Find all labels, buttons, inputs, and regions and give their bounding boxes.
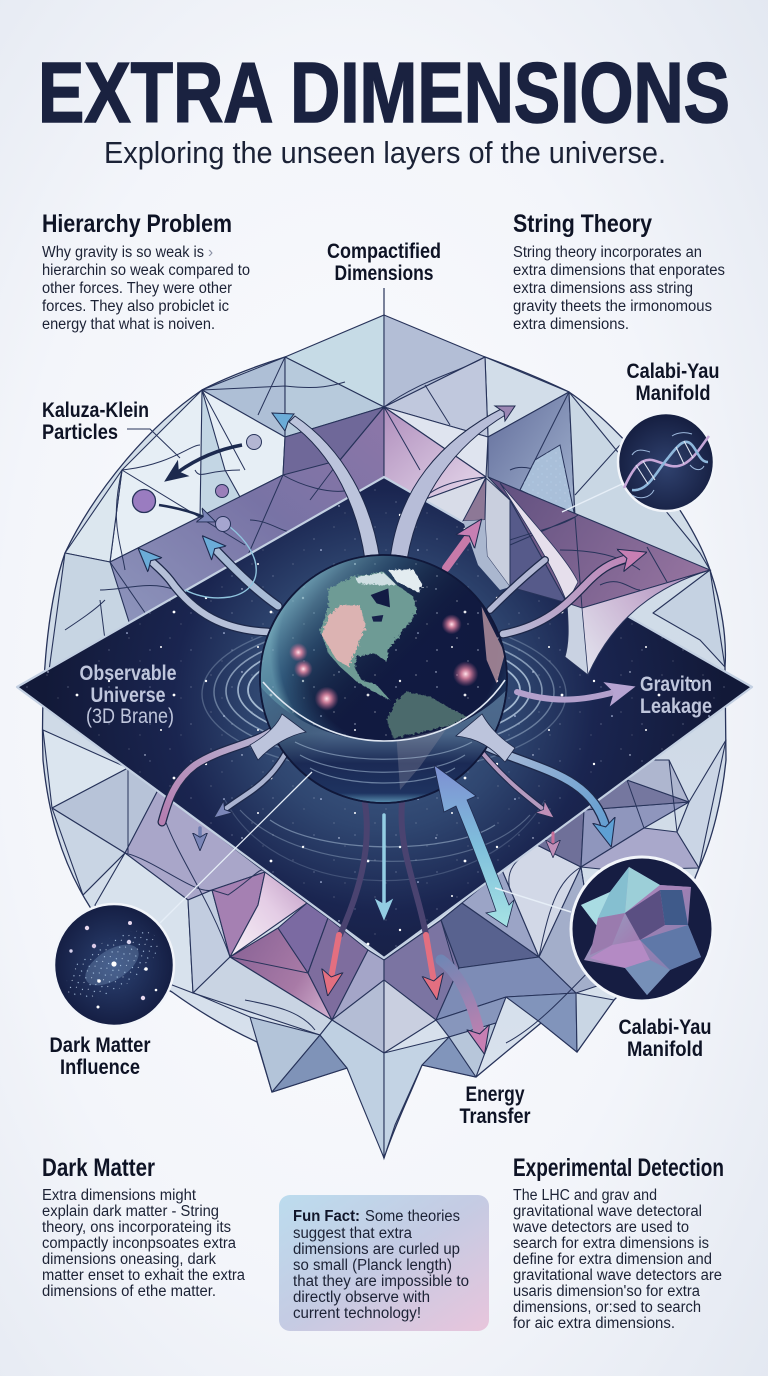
label: dark matter influence: Dark Matter: [50, 1034, 150, 1057]
hudson bay: [371, 588, 390, 607]
label: energy transfer: [460, 1083, 530, 1128]
mauve wall: [463, 478, 486, 521]
text block: hierarchy problem: [42, 210, 250, 333]
text block: hierarchy problem: hierarchin so weak compared to: [42, 262, 250, 279]
arrow: small pink: [552, 833, 554, 845]
globe upper sphere: [261, 556, 506, 740]
text block: experimental detection: define for extra dimension and: [513, 1251, 712, 1268]
pale column: [565, 603, 588, 675]
arrow: right mauve: [480, 750, 544, 810]
text block: hierarchy problem: energy that what is noiven.: [42, 316, 215, 333]
text block: experimental detection: wave detectors are used to: [512, 1219, 689, 1236]
great lakes: [372, 615, 383, 622]
arrow: up-right purple: [390, 406, 515, 560]
tendril roots at globe: [250, 714, 515, 762]
text block: hierarchy problem: Hierarchy Problem: [42, 210, 232, 238]
inset: dark matter: [54, 904, 174, 1026]
arrow: left blue long: [148, 558, 268, 632]
text block: string theory: String theory incorporates an: [513, 244, 702, 261]
particles: [132, 490, 156, 512]
text block: experimental detection: usaris dimension'so for extra: [513, 1283, 700, 1300]
label: observable universe: [80, 662, 176, 728]
text block: string theory: [513, 210, 725, 333]
nebula glow: [289, 643, 308, 662]
arrow: right blue: [466, 737, 606, 828]
greenland: [388, 569, 423, 593]
text block: experimental detection: The LHC and grav and: [513, 1187, 657, 1204]
label: graviton leakage: Leakage: [640, 695, 712, 718]
text block: dark matter: dimensions of ethe matter.: [42, 1283, 216, 1300]
arrow: left blue short: [214, 548, 278, 606]
cyan arc: [185, 527, 256, 598]
equator ripples: [295, 742, 472, 783]
kaluza-klein particles: Particles: [42, 421, 118, 444]
subtitle: Exploring the unseen layers of the universe.: [104, 135, 666, 170]
dark wall: [510, 500, 567, 603]
label: calabi-yau lower: Calabi-Yau: [618, 1016, 712, 1039]
pale wall: [485, 478, 510, 587]
sliver sheet: [500, 483, 578, 603]
arrow: small lattice arrow: [198, 828, 202, 838]
label: observable universe: Universe: [90, 684, 166, 707]
text block: hierarchy problem: ›: [208, 244, 213, 261]
label: graviton leakage: Graviton: [640, 673, 712, 696]
callout: fun fact: [279, 1195, 489, 1331]
particle arrows: [178, 445, 242, 472]
label: energy transfer: Transfer: [460, 1105, 530, 1128]
label: dark matter influence: [50, 1034, 150, 1079]
text block: dark matter: matter enset to exhait the extra: [42, 1267, 245, 1284]
arrow: energy transfer: [441, 960, 480, 1035]
text block: experimental detection: gravitational wave detectoral: [513, 1203, 702, 1220]
label: calabi-yau top: [626, 360, 720, 405]
text block: string theory: extra dimensions ass string: [513, 280, 693, 297]
callout: fun fact: directly observe with: [293, 1289, 430, 1306]
globe rim line: [263, 680, 505, 741]
inset: calabi-yau helix: [618, 413, 714, 511]
africa: [482, 607, 505, 683]
arrow: red left: [331, 935, 339, 978]
text block: dark matter: dimensions oneasing, dark: [42, 1251, 216, 1268]
arrow: centre blue: [382, 815, 386, 905]
callout: fun fact: dimensions are curled up: [293, 1241, 460, 1258]
text block: dark matter: Dark Matter: [42, 1154, 155, 1182]
text block: experimental detection: [512, 1154, 724, 1332]
arrow: pink up: [446, 535, 470, 568]
lower facets: [43, 730, 726, 1158]
text block: string theory: extra dimensions that enporates: [513, 262, 725, 279]
text block: experimental detection: search for extra dimensions is: [513, 1235, 709, 1252]
tendrils and arrows: [148, 406, 630, 982]
label: calabi-yau lower: Manifold: [627, 1038, 703, 1061]
label: calabi-yau top: Calabi-Yau: [626, 360, 720, 383]
text block: string theory: extra dimensions.: [513, 316, 629, 333]
inset: polyhedron manifold: [571, 857, 713, 1001]
south america: [387, 692, 467, 738]
label: dark matter influence: Influence: [60, 1056, 140, 1079]
upper facets: [45, 315, 725, 700]
label: observable universe: (3D Brane): [86, 705, 174, 728]
arrow: red right: [426, 935, 434, 982]
text block: hierarchy problem: other forces. They were other: [42, 280, 232, 297]
blue wall: [463, 520, 510, 590]
text block: experimental detection: gravitational wave detectors are: [513, 1267, 722, 1284]
text block: dark matter: explain dark matter - String: [42, 1203, 219, 1220]
leader lines: [160, 484, 622, 923]
tendrils: below globe: [340, 803, 426, 935]
roof and wall curves: [65, 357, 650, 640]
western north america: [322, 605, 366, 667]
arrow: lower-left slate: [224, 737, 294, 810]
kaluza-klein particles: [42, 399, 262, 532]
text block: dark matter: Extra dimensions might: [42, 1187, 197, 1204]
callout: fun fact: suggest that extra: [293, 1225, 412, 1242]
extra-dimensional lattice: [43, 315, 726, 1158]
callout: fun fact: that they are impossible to: [293, 1273, 469, 1290]
text block: string theory: gravity theets the irmonomous: [513, 298, 712, 315]
globe lower bubble: [260, 555, 507, 803]
teal atmosphere: [261, 556, 458, 738]
label: calabi-yau top: Manifold: [636, 382, 710, 405]
purple band: [488, 477, 710, 608]
text block: hierarchy problem: Why gravity is so weak is: [42, 244, 204, 261]
callout: fun fact: Some theories: [365, 1208, 460, 1225]
callout: fun fact: current technology!: [293, 1305, 421, 1322]
arrow: up-left blue: [272, 413, 380, 560]
label: compactified dimensions: Compactified: [327, 240, 441, 263]
3D brane: observable universe diamond: [17, 477, 752, 958]
label: compactified dimensions: [327, 240, 441, 316]
callout: fun fact: so small (Planck length): [293, 1257, 452, 1274]
text block: dark matter: [42, 1154, 245, 1300]
label: energy transfer: Energy: [466, 1083, 525, 1106]
lower construction lines: [83, 760, 677, 1043]
main sheet: [565, 570, 710, 675]
continents: [289, 569, 505, 790]
text block: dark matter: compactly inconpsoates extra: [42, 1235, 236, 1252]
text block: string theory: String Theory: [513, 210, 652, 238]
label: calabi-yau lower: [618, 1016, 712, 1061]
canada ice: [355, 573, 397, 585]
starry wall patch: [520, 445, 575, 517]
kaluza-klein label: Kaluza-Klein: [42, 399, 149, 422]
wall and membrane overlapping the brane: [463, 445, 710, 675]
arrow: right magenta: [503, 558, 630, 634]
north america: [320, 572, 417, 700]
text block: experimental detection: dimensions, or:sed to search: [513, 1299, 701, 1316]
text block: dark matter: theory, ons incorporateing its: [42, 1219, 231, 1236]
arrow: large double-headed: [434, 765, 514, 927]
arrow: graviton leakage: [517, 692, 615, 700]
label: observable universe: Observable: [80, 662, 176, 685]
callout: fun fact: Fun Fact:: [293, 1208, 360, 1225]
tendril: right upper branch: [490, 560, 545, 610]
south america reflection: [397, 728, 447, 790]
text block: experimental detection: for aic extra dimensions.: [513, 1315, 675, 1332]
label: compactified dimensions: Dimensions: [334, 262, 434, 285]
globe: [259, 554, 508, 804]
arrow: lower-left pink fade: [162, 722, 284, 822]
gravitational ripples: [202, 616, 566, 881]
text block: hierarchy problem: forces. They also probiclet ic: [42, 298, 229, 315]
label: graviton leakage: [640, 673, 712, 718]
outer shell: [43, 315, 726, 1158]
